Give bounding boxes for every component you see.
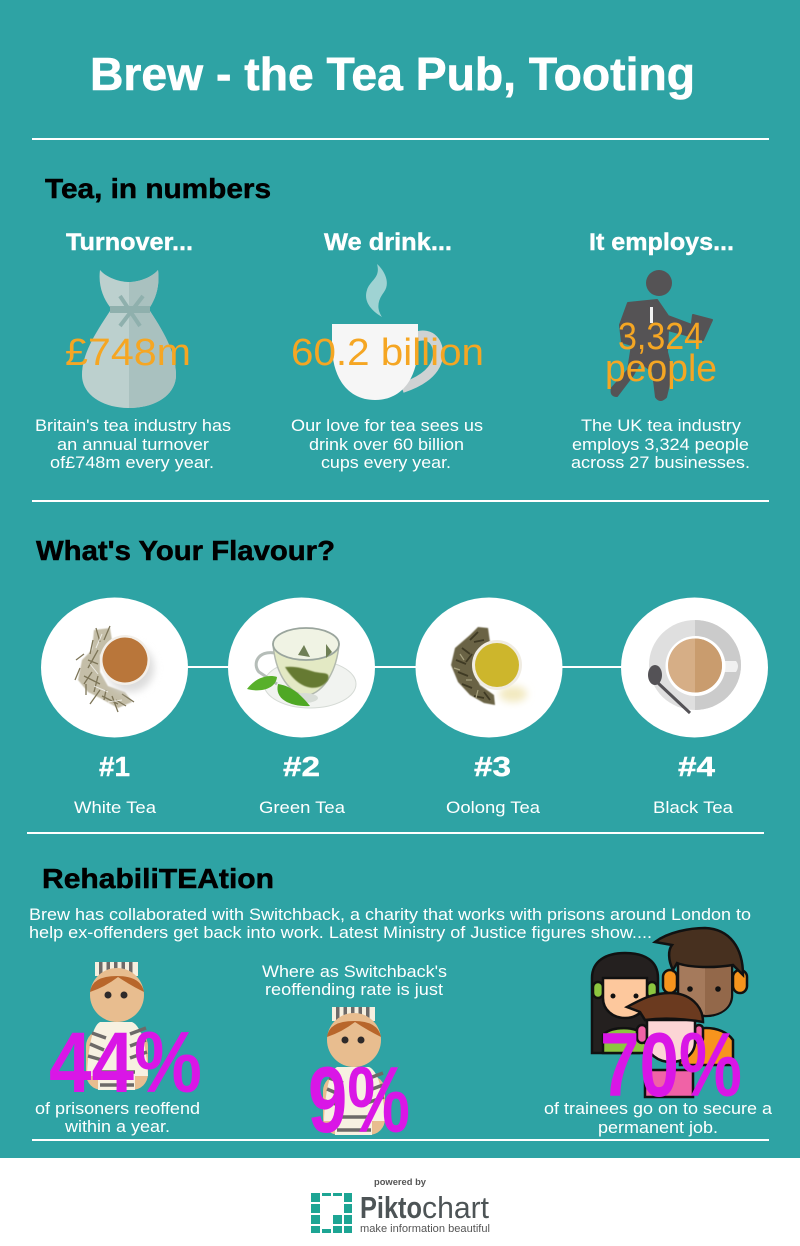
heading: rehabiliteation: RehabiliTEAtion bbox=[42, 863, 274, 894]
description: cups bbox=[291, 416, 483, 472]
description: turnover: an annual turnover bbox=[57, 435, 209, 454]
caption: reoffend bbox=[35, 1099, 200, 1136]
intro text: help ex-offenders get back into work. Latest Ministry of Justice figures show.... bbox=[29, 923, 652, 942]
stat: 748m: £748m bbox=[65, 332, 191, 374]
subheading: it employs: It employs... bbox=[589, 229, 734, 256]
item: green tea bbox=[228, 598, 375, 817]
description: jobs bbox=[571, 416, 750, 472]
rank: #3 bbox=[474, 751, 511, 782]
logo wordmark bbox=[360, 1190, 489, 1225]
icon: prisoner left bbox=[86, 962, 148, 1090]
rank: #2 bbox=[283, 751, 320, 782]
subheading: we drink: We drink... bbox=[324, 229, 452, 256]
icon: tea cup bbox=[332, 264, 438, 400]
name: White Tea bbox=[74, 798, 157, 817]
title: Brew - the Tea Pub, Tooting bbox=[90, 48, 695, 100]
logo tagline: make information beautiful bbox=[360, 1223, 490, 1235]
intro text bbox=[29, 905, 751, 942]
description: jobs: across 27 businesses. bbox=[571, 453, 750, 472]
stat: 9 percent: 9% bbox=[308, 1047, 410, 1152]
description: turnover: Britain's tea industry has bbox=[35, 416, 231, 435]
panel: tea in numbers bbox=[35, 173, 750, 472]
footer bbox=[0, 1158, 800, 1246]
icon: prisoner centre bbox=[323, 1007, 385, 1135]
icon: piktochart logo bbox=[311, 1193, 352, 1233]
icon: oolong tea cup and leaves bbox=[451, 627, 527, 705]
description: cups: Our love for tea sees us bbox=[291, 416, 483, 435]
caption: trainees: of trainees go on to secure a bbox=[544, 1099, 773, 1118]
intro text: Brew has collaborated with Switchback, a charity that works with prisons around London to bbox=[29, 905, 751, 924]
panel: rehabiliteation bbox=[29, 863, 773, 1152]
name: Oolong Tea bbox=[446, 798, 541, 817]
caption: switchback rate: reoffending rate is just bbox=[265, 980, 443, 999]
stat: 3,324 people: people bbox=[605, 348, 717, 390]
caption: reoffend: within a year. bbox=[64, 1117, 170, 1136]
logo wordmark: Pikto bbox=[360, 1190, 422, 1225]
stat: 3,324 people: 3,324 bbox=[618, 316, 703, 358]
heading: flavour: What's Your Flavour? bbox=[36, 535, 335, 566]
column: we drink bbox=[291, 229, 484, 472]
item: oolong tea bbox=[416, 598, 562, 817]
name: Green Tea bbox=[259, 798, 346, 817]
rank: #4 bbox=[678, 751, 715, 782]
heading: tea in numbers: Tea, in numbers bbox=[45, 173, 271, 204]
panel: what's your flavour bbox=[36, 535, 768, 817]
logo wordmark: chart bbox=[422, 1190, 489, 1225]
stat: 70 percent: 70% bbox=[600, 1015, 742, 1116]
description: turnover: of£748m every year. bbox=[50, 453, 214, 472]
stat: 3,324 people bbox=[605, 316, 717, 390]
caption: reoffend: of prisoners reoffend bbox=[35, 1099, 200, 1118]
icon: black tea cup bbox=[648, 620, 741, 713]
caption: trainees: permanent job. bbox=[598, 1118, 718, 1137]
description: turnover bbox=[35, 416, 231, 472]
stat: 44 percent: 44% bbox=[49, 1015, 202, 1111]
caption: switchback rate bbox=[262, 962, 447, 999]
column: employs bbox=[571, 229, 750, 472]
subheading: turnover: Turnover... bbox=[66, 229, 193, 256]
icon: money bag bbox=[82, 270, 176, 408]
description: jobs: employs 3,324 people bbox=[572, 435, 749, 454]
footer text: powered by: powered by bbox=[374, 1177, 427, 1188]
stat: 60.2 billion: 60.2 billion bbox=[291, 332, 484, 374]
description: cups: cups every year. bbox=[321, 453, 451, 472]
item: white tea bbox=[41, 598, 188, 817]
column: turnover bbox=[35, 229, 231, 472]
description: cups: drink over 60 billion bbox=[309, 435, 464, 454]
icon: running businessman bbox=[612, 270, 712, 400]
icon: call centre trainees bbox=[592, 928, 747, 1097]
description: jobs: The UK tea industry bbox=[581, 416, 742, 435]
rank: #1 bbox=[99, 751, 130, 782]
name: Black Tea bbox=[653, 798, 734, 817]
item: black tea bbox=[621, 598, 768, 817]
icon: green tea glass bbox=[247, 628, 356, 708]
icon: white tea cup and leaves bbox=[75, 626, 154, 712]
caption: switchback rate: Where as Switchback's bbox=[262, 962, 447, 981]
caption: trainees bbox=[544, 1099, 773, 1137]
